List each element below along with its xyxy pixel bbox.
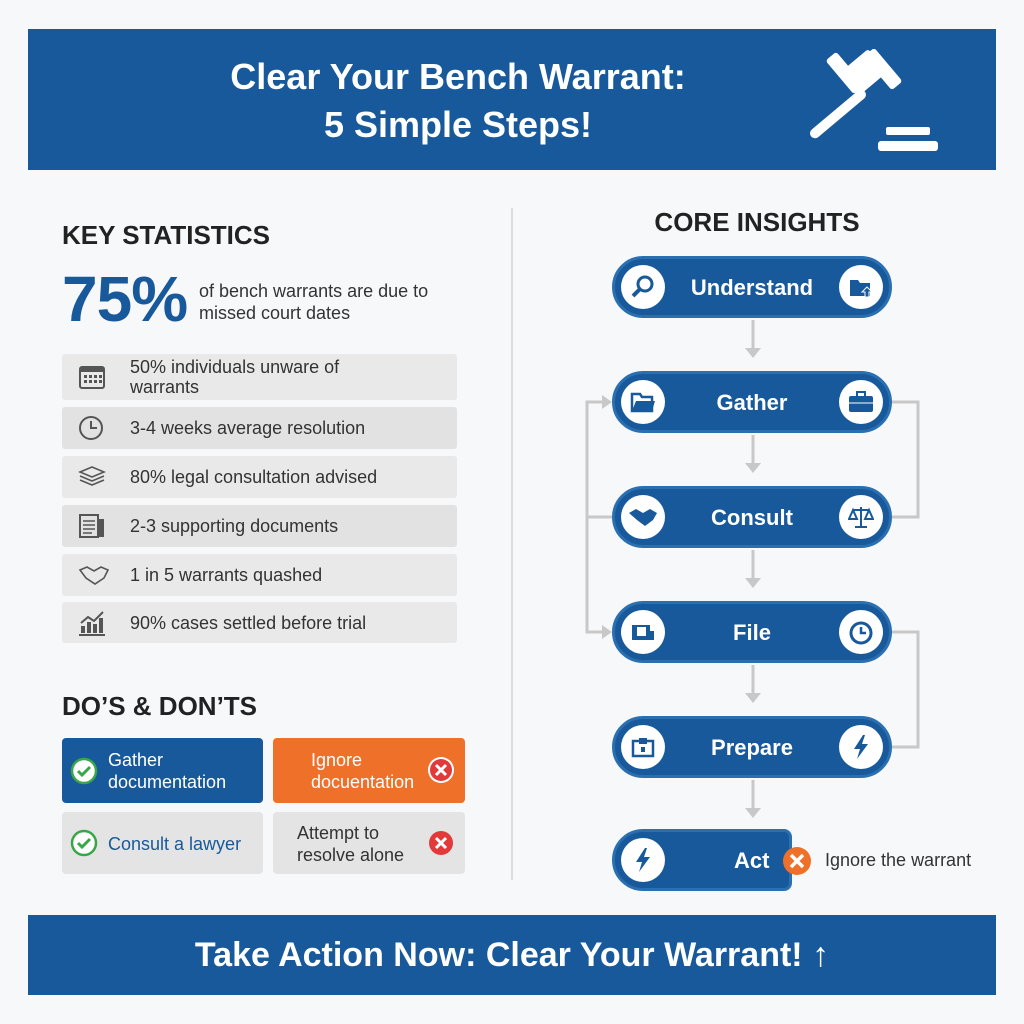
- stat: settled: 90% cases settled before trial: [130, 612, 366, 632]
- step: gather: Gather: [717, 390, 787, 415]
- step: prepare: Prepare: [711, 735, 793, 760]
- step: understand: [612, 256, 892, 318]
- step: gather: [612, 371, 892, 433]
- stat: quashed: 1 in 5 warrants quashed: [130, 565, 322, 585]
- step: file: File: [733, 620, 771, 645]
- dont: ignore documentation: [273, 738, 465, 803]
- stat: quashed: [62, 554, 457, 596]
- dont: ignore documentation: Ignore: [311, 750, 362, 770]
- step: act: Act: [734, 848, 769, 873]
- stat: weeks: [62, 407, 457, 449]
- heading: core insights: CORE INSIGHTS: [654, 207, 860, 237]
- stat list: [62, 354, 457, 643]
- dont: attempt alone: Attempt to: [297, 823, 379, 843]
- stat: settled: [62, 602, 457, 643]
- icon: gavel: [810, 49, 938, 151]
- do: gather documentation: Gather: [108, 750, 163, 770]
- step: consult: [612, 486, 892, 548]
- big stat 75%: 75%: [62, 263, 187, 335]
- callout: ignore the warrant: Ignore the warrant: [825, 850, 971, 870]
- dont: attempt alone: [273, 812, 465, 874]
- footer banner: Take Action Now: Clear Your Warrant! ↑: [195, 936, 829, 974]
- title: 5 Simple Steps!: [324, 104, 592, 145]
- stat: documents: 2-3 supporting documents: [130, 516, 338, 536]
- footer banner: [28, 915, 996, 995]
- divider: [511, 208, 513, 880]
- big stat 75%: [62, 263, 428, 335]
- flow connectors: [586, 320, 920, 818]
- do: consult a lawyer: Consult a lawyer: [108, 834, 241, 854]
- step: act: [612, 829, 792, 891]
- dont: ignore documentation: docuentation: [311, 772, 414, 792]
- stat: unaware: warrants: [130, 377, 199, 397]
- step: understand: Understand: [691, 275, 813, 300]
- stat: unaware: [62, 354, 457, 400]
- step: file: [612, 601, 892, 663]
- title: [230, 56, 686, 145]
- dont: attempt alone: resolve alone: [297, 845, 404, 865]
- callout: ignore the warrant: [783, 847, 971, 875]
- stat: unaware: 50% individuals unware of: [130, 357, 339, 377]
- big stat 75%: of bench warrants are due to missed court dates: [199, 281, 428, 323]
- step: prepare: [612, 716, 892, 778]
- do: consult a lawyer: [62, 812, 263, 874]
- step: consult: Consult: [711, 505, 793, 530]
- stat: weeks: 3-4 weeks average resolution: [130, 418, 365, 438]
- do: gather documentation: documentation: [108, 772, 226, 792]
- stat: legal: [62, 456, 457, 498]
- heading: key statistics: KEY STATISTICS: [62, 220, 270, 250]
- title: Clear Your Bench Warrant:: [230, 56, 686, 97]
- do: gather documentation: [62, 738, 263, 803]
- stat: legal: 80% legal consultation advised: [130, 467, 377, 487]
- header banner: [28, 29, 996, 170]
- stat: documents: [62, 505, 457, 547]
- heading: dos and donts: DO’S & DON’TS: [62, 691, 257, 721]
